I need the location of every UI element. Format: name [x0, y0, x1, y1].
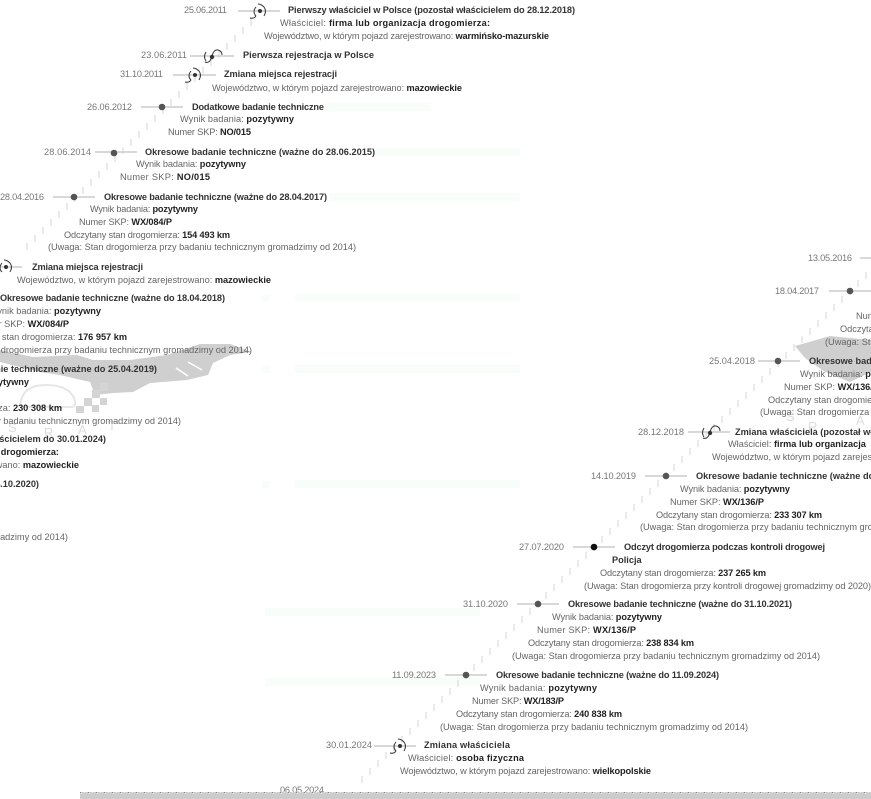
- entry: 28.04.2016 periodic inspection: (Uwaga: Stan drogomierza przy badaniu technicznym gromadzimy od 2014): [48, 242, 356, 252]
- marker dot: [71, 194, 77, 200]
- entry: 27.07.2020 roadside check: (Uwaga: Stan drogomierza przy kontroli drogowej gromadzimy od 2020): [584, 581, 871, 591]
- marker dot: [775, 358, 781, 364]
- entry: registration place change, clipped left: Województwo, w którym pojazd zarejestrowano: mazowieckie: [17, 275, 271, 285]
- entry: 27.07.2020 roadside check: Odczytany stan drogomierza: 237 265 km: [600, 568, 766, 578]
- entry: 14.10.2019 right: Numer SKP: WX/136/P: [670, 497, 764, 507]
- marker dot: [159, 104, 165, 110]
- entry: 25.04.2018 right: 25.04.2018: [709, 356, 755, 366]
- entry: inspection valid to 18.04.2018, clipped left: [0, 293, 252, 355]
- entry: inspection valid to 18.04.2018, clipped left: Okresowe badanie techniczne (ważne do 18.04.2018): [0, 293, 225, 303]
- marker dot: [591, 544, 597, 550]
- entry: 11.09.2023: Numer SKP: WX/183/P: [472, 696, 564, 706]
- faint green highlights: [262, 103, 520, 686]
- entry: 30.01.2024 owner change: Właściciel: osoba fizyczna: [408, 753, 525, 763]
- entry: 31.10.2020: (Uwaga: Stan drogomierza przy badaniu technicznym gromadzimy od 2014): [512, 651, 820, 661]
- entry: 27.07.2020 roadside check: Policja: [612, 555, 643, 565]
- bottom dotted bar: [80, 792, 871, 799]
- entry: 14.10.2019 right: [591, 471, 871, 532]
- entry: 30.01.2024 owner change: Województwo, w którym pojazd zarejestrowano: wielkopolskie: [400, 766, 651, 776]
- icon: registration change: [0, 260, 12, 272]
- watermark: winged car logo left: [0, 344, 252, 440]
- entry: 28.12.2018 owner change right: 28.12.2018: [638, 427, 684, 437]
- entry: inspection valid to 14.10.2020, clipped left: [0, 479, 68, 542]
- entry: 28.04.2016 periodic inspection: 28.04.2016: [0, 192, 44, 202]
- entry: 30.01.2024 owner change: [326, 739, 651, 776]
- entry: 28.06.2014 periodic inspection: [44, 147, 375, 182]
- marker dot: [663, 473, 669, 479]
- entry: 26.06.2012 additional inspection: Dodatkowe badanie techniczne: [192, 102, 324, 112]
- entry: owner change clipped left: [0, 434, 106, 470]
- entry: 31.10.2020: Numer SKP: WX/136/P: [537, 625, 636, 635]
- entry: 11.09.2023: 11.09.2023: [392, 670, 436, 680]
- entry: 31.10.2011 registration place change: [120, 68, 462, 93]
- entry: 14.10.2019 right: 14.10.2019: [591, 471, 636, 481]
- timeline axis left: [27, 19, 251, 250]
- entry: 28.06.2014 periodic inspection: Okresowe badanie techniczne (ważne do 28.06.2015): [145, 147, 375, 157]
- watermark: winged car logo left: S: [8, 420, 17, 435]
- entry: 31.10.2020: Okresowe badanie techniczne (ważne do 31.10.2021): [568, 599, 792, 609]
- watermark: winged car logo right: A: [856, 413, 865, 428]
- marker dot: [535, 601, 541, 607]
- watermark: winged car logo right: R: [808, 419, 817, 434]
- watermark: winged car logo right: [786, 336, 871, 434]
- entry: 31.10.2020: Wynik badania: pozytywny: [552, 612, 663, 622]
- entry: 30.01.2024 owner change: 30.01.2024: [326, 740, 372, 750]
- marker dot: [847, 288, 853, 294]
- entry: 11.09.2023: Wynik badania: pozytywny: [480, 683, 598, 693]
- entry: 27.07.2020 roadside check: [519, 542, 871, 591]
- entry: 11.09.2023: [392, 670, 748, 732]
- entry: 31.10.2011 registration place change: 31.10.2011: [120, 69, 163, 79]
- entry: 31.10.2011 registration place change: Województwo, w którym pojazd zarejestrowano: mazowieckie: [212, 83, 462, 93]
- entry: registration place change, clipped left: Zmiana miejsca rejestracji: [32, 262, 143, 272]
- entry: 18.04.2017 right: 18.04.2017: [775, 286, 819, 296]
- entry: 30.01.2024 owner change: Zmiana właściciela: [424, 740, 511, 750]
- entry: 28.12.2018 owner change right: Właściciel: firma lub organizacja: [728, 439, 867, 449]
- entry: 28.04.2016 periodic inspection: [0, 192, 356, 252]
- entry: 28.06.2014 periodic inspection: Wynik badania: pozytywny: [136, 159, 247, 169]
- entry: 25.06.2011 first owner: [184, 4, 575, 41]
- entry: 11.09.2023: Okresowe badanie techniczne (ważne do 11.09.2024): [496, 670, 719, 680]
- entry: 31.10.2020: 31.10.2020: [463, 599, 508, 609]
- icon: registration: [204, 50, 222, 62]
- entry: 25.06.2011 first owner: 25.06.2011: [184, 5, 227, 15]
- entry: 27.07.2020 roadside check: Odczyt drogomierza podczas kontroli drogowej: [624, 542, 825, 552]
- entry: registration place change, clipped left: [0, 260, 271, 285]
- entry: 18.04.2017 right: [775, 286, 871, 347]
- entry: 11.09.2023: (Uwaga: Stan drogomierza przy badaniu technicznym gromadzimy od 2014): [440, 722, 748, 732]
- watermark: winged car logo left: R: [44, 425, 53, 440]
- entry: 26.06.2012 additional inspection: 26.06.2012: [87, 102, 132, 112]
- icon: owner change: [250, 4, 266, 18]
- entry: 23.06.2011 first registration: 23.06.2011: [141, 50, 187, 60]
- entry: 28.04.2016 periodic inspection: Numer SKP: WX/084/P: [79, 217, 172, 227]
- watermark: winged car logo left: T: [108, 418, 116, 433]
- entry: 23.06.2011 first registration: Pierwsza rejestracja w Polsce: [243, 50, 374, 60]
- entry: 25.06.2011 first owner: Właściciel: firma lub organizacja drogomierza:: [280, 18, 490, 28]
- entry: inspection valid to 25.04.2019, clipped left: [0, 364, 181, 426]
- entry: 26.06.2012 additional inspection: [87, 102, 324, 137]
- entry: 28.04.2016 periodic inspection: Wynik badania: pozytywny: [90, 204, 199, 214]
- entry: 31.10.2020: [463, 599, 820, 661]
- entry: 28.06.2014 periodic inspection: Numer SKP: NO/015: [120, 172, 210, 182]
- entry: 28.04.2016 periodic inspection: Okresowe badanie techniczne (ważne do 28.04.2017): [104, 192, 327, 202]
- entry: 31.10.2011 registration place change: Zmiana miejsca rejestracji: [224, 69, 337, 79]
- entry: 25.04.2018 right: [709, 356, 871, 417]
- marker dot: [111, 150, 117, 156]
- entry: 23.06.2011 first registration: [141, 50, 374, 62]
- entry: 13.05.2016 right: [808, 253, 871, 263]
- entry: 26.06.2012 additional inspection: Numer SKP: NO/015: [168, 127, 251, 137]
- entry: 28.06.2014 periodic inspection: 28.06.2014: [44, 147, 91, 157]
- entry: 11.09.2023: Odczytany stan drogomierza: 240 838 km: [456, 709, 622, 719]
- entry: 25.06.2011 first owner: Pierwszy właściciel w Polsce (pozostał właścicielem do 28.12.2018): [288, 5, 575, 15]
- entry: 27.07.2020 roadside check: 27.07.2020: [519, 542, 564, 552]
- icon: owner change: [702, 426, 720, 438]
- timeline axis right: [362, 272, 866, 783]
- entry: 28.12.2018 owner change right: [638, 426, 871, 462]
- entry: 25.06.2011 first owner: Województwo, w którym pojazd zarejestrowano: warmińsko-mazurskie: [264, 31, 549, 41]
- entry: 26.06.2012 additional inspection: Wynik badania: pozytywny: [180, 114, 295, 124]
- entry: 14.10.2019 right: Odczytany stan drogomierza: 233 307 km: [656, 510, 822, 520]
- entry: 28.04.2016 periodic inspection: Odczytany stan drogomierza: 154 493 km: [64, 230, 230, 240]
- entry: 14.10.2019 right: Wynik badania: pozytywny: [680, 484, 791, 494]
- watermark: winged car logo right: S: [786, 409, 795, 424]
- entry: 13.05.2016 right: 13.05.2016: [808, 253, 852, 263]
- watermark: winged car logo left: A: [78, 422, 87, 437]
- marker dot: [463, 672, 469, 678]
- entry: 31.10.2020: Odczytany stan drogomierza: 238 834 km: [528, 638, 694, 648]
- icon: registration change: [185, 68, 200, 82]
- entry: 06.05.2024 date: 06.05.2024: [280, 785, 324, 795]
- icon: owner change: [390, 739, 406, 753]
- entry: owner change clipped left: drogomierza:: [1, 447, 59, 457]
